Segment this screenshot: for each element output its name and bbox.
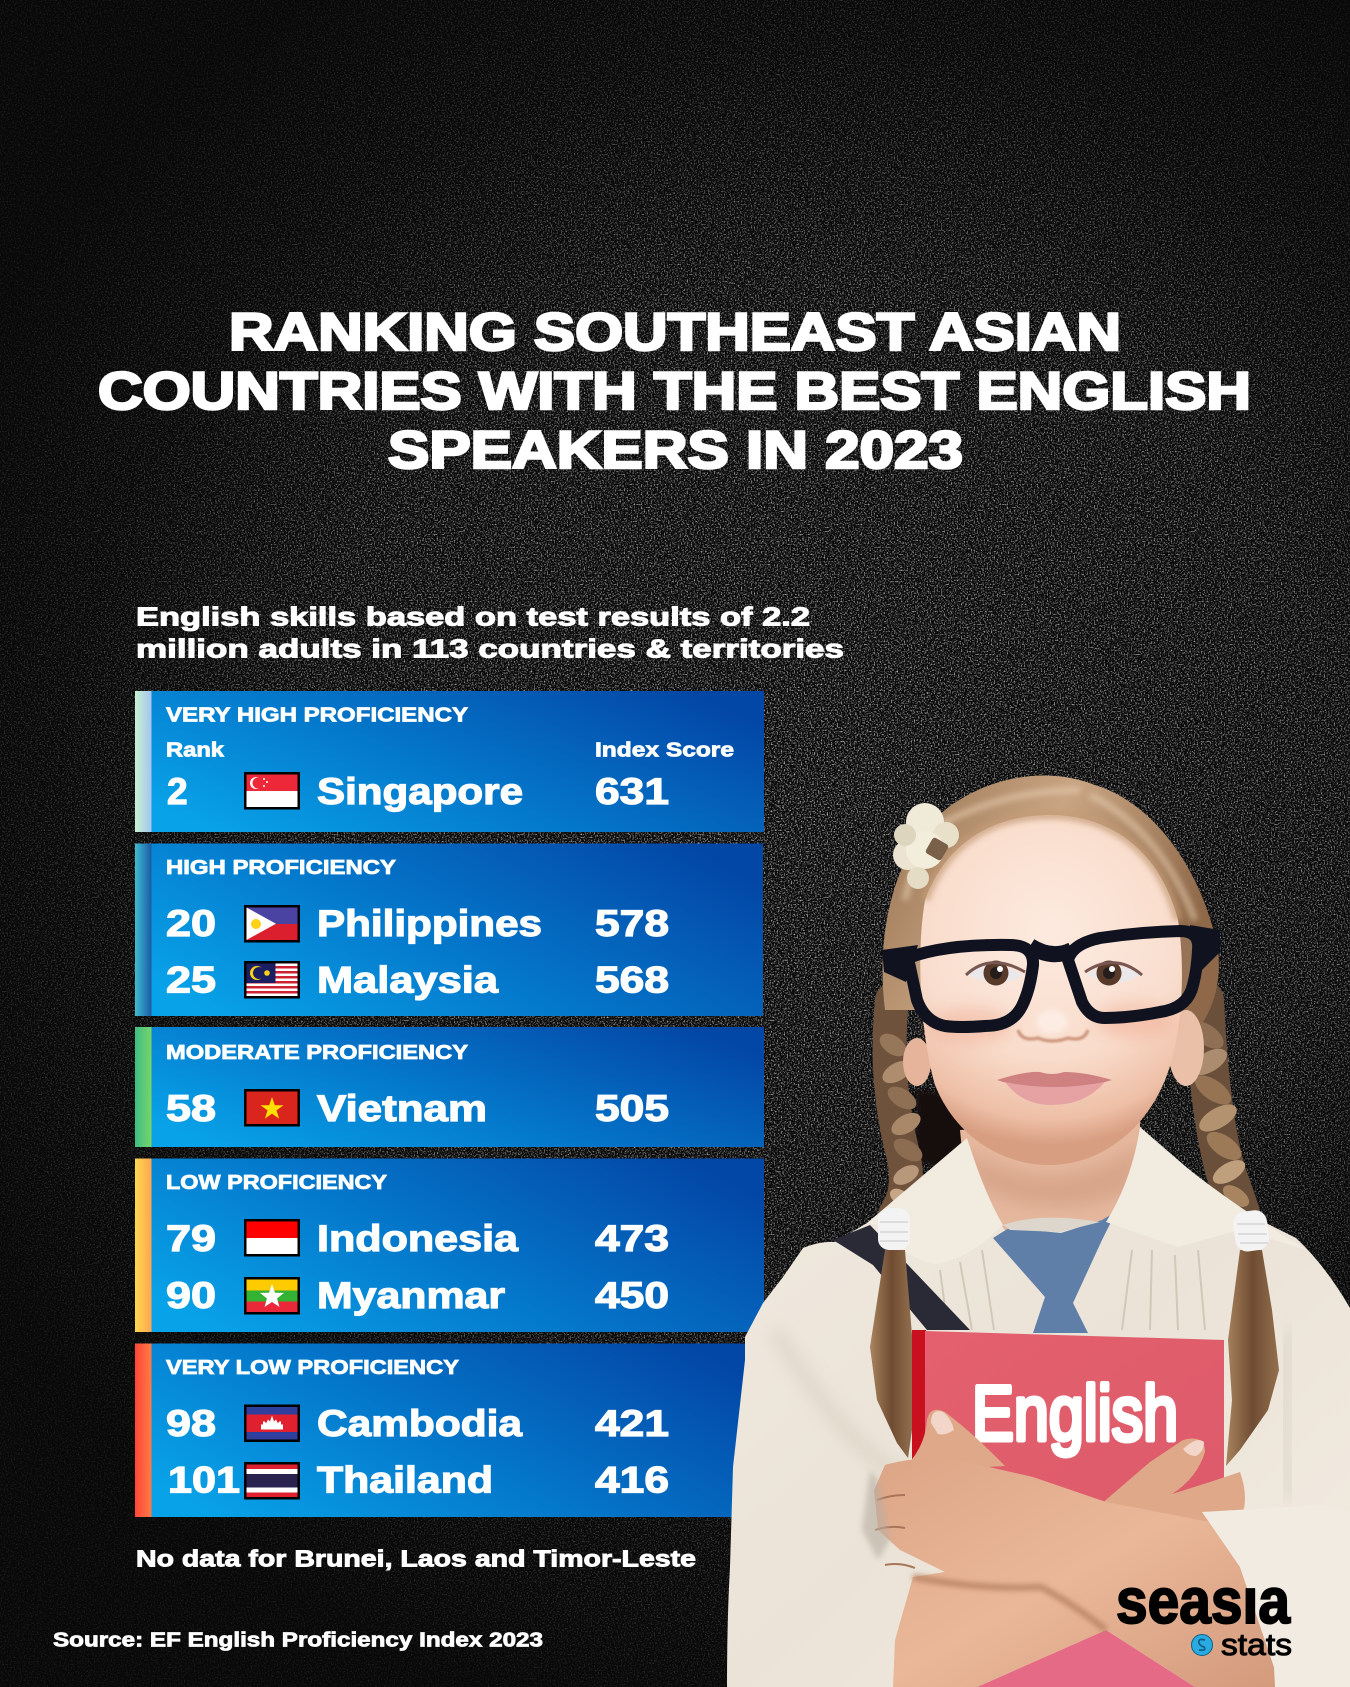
row: Malaysia (166, 960, 669, 1000)
flag: Philippines (244, 905, 300, 942)
row: Thailand: 416 (595, 1460, 669, 1500)
title: SPEAKERS IN 2023 (388, 421, 963, 480)
row: Singapore (167, 771, 669, 812)
row: Cambodia: 98 (166, 1403, 216, 1444)
row: Cambodia (166, 1403, 669, 1444)
lips (997, 1072, 1112, 1105)
row: Myanmar (166, 1275, 669, 1316)
row: Singapore: 631 (595, 771, 669, 812)
heading: moderate proficiency: MODERATE PROFICIENCY (166, 1042, 469, 1064)
row: Malaysia: 25 (166, 960, 216, 1000)
heading: very low proficiency: VERY LOW PROFICIENCY (166, 1357, 460, 1379)
row: Vietnam: 505 (595, 1088, 669, 1129)
collar (867, 1127, 1307, 1264)
neck (960, 1120, 1140, 1230)
soft hairline (925, 815, 1178, 920)
row: Malaysia: Malaysia (317, 960, 498, 1000)
title: COUNTRIES WITH THE BEST ENGLISH (98, 362, 1251, 421)
logo: seasia stats: seasia (1116, 1565, 1290, 1637)
shirt (727, 1127, 1350, 1687)
row: Malaysia: 568 (595, 960, 669, 1000)
backpack strap (833, 1225, 970, 1330)
row: Cambodia: Cambodia (317, 1403, 522, 1444)
hair flower clip (893, 803, 959, 889)
heading: very high proficiency: VERY HIGH PROFICIENCY (166, 704, 469, 726)
panel: moderate proficiency (135, 1027, 764, 1147)
column label: rank: Rank (166, 740, 225, 762)
row: Thailand: Thailand (317, 1460, 493, 1500)
row: Thailand: 101 (168, 1460, 240, 1500)
title (98, 303, 1251, 480)
logo: seasia stats (1116, 1587, 1292, 1656)
row: Indonesia: 79 (166, 1218, 216, 1259)
nose (1018, 1010, 1088, 1041)
row: Myanmar: Myanmar (317, 1275, 505, 1316)
hair (882, 775, 1219, 1030)
source: Source: EF English Proficiency Index 2023 (53, 1630, 543, 1652)
right ponytail (1226, 1209, 1279, 1466)
note: missing data: No data for Brunei, Laos and Timor-Leste (136, 1546, 696, 1572)
row: Philippines: 20 (166, 903, 216, 944)
book (912, 1330, 1224, 1687)
flag: Myanmar (244, 1277, 300, 1314)
row: Philippines (166, 903, 669, 944)
cheek blush (928, 1002, 1175, 1043)
row: Thailand (168, 1460, 669, 1500)
illustration: girl with glasses holding English book (727, 775, 1350, 1687)
row: Indonesia: 473 (595, 1218, 669, 1259)
flag: Cambodia (244, 1404, 300, 1442)
back hair and braids (876, 1000, 1253, 1220)
row: Myanmar: 450 (595, 1275, 669, 1316)
row: Singapore: Singapore (317, 771, 523, 812)
row: Philippines: 578 (595, 903, 669, 944)
icon: stats badge (1192, 1634, 1212, 1656)
column label: index score: Index Score (595, 740, 734, 762)
title: RANKING SOUTHEAST ASIAN (229, 303, 1121, 362)
right eye (1085, 960, 1142, 986)
row: Vietnam: 58 (166, 1088, 216, 1129)
row: Myanmar: 90 (166, 1275, 216, 1316)
head (882, 775, 1220, 1165)
flag: Indonesia (244, 1219, 300, 1256)
row: Singapore: 2 (167, 771, 188, 812)
heading: low proficiency: LOW PROFICIENCY (166, 1172, 388, 1194)
tie (993, 1212, 1116, 1333)
row: Cambodia: 421 (595, 1403, 669, 1444)
row: Indonesia (166, 1218, 669, 1259)
row: Indonesia: Indonesia (317, 1218, 518, 1259)
flag: Singapore (244, 772, 300, 810)
panel: high proficiency (135, 844, 763, 1016)
left ponytail (870, 1208, 913, 1458)
face (920, 815, 1182, 1165)
row: Vietnam (166, 1088, 669, 1129)
flag: Malaysia (244, 961, 300, 998)
heading: high proficiency: HIGH PROFICIENCY (166, 857, 397, 879)
ears (903, 1038, 931, 1086)
panel: very low proficiency (135, 1344, 764, 1517)
subtitle (136, 602, 844, 664)
panel: very high proficiency (135, 691, 764, 832)
arms and hands (862, 1410, 1350, 1687)
logo: seasia stats: stats (1221, 1627, 1292, 1662)
left eye (966, 960, 1025, 986)
book cover lettering: English (972, 1369, 1178, 1457)
glasses (882, 925, 1220, 1027)
subtitle: English skills based on test results of 2.2 (136, 602, 810, 632)
flag: Vietnam (244, 1089, 300, 1126)
row: Vietnam: Vietnam (317, 1088, 487, 1129)
panel: low proficiency (135, 1158, 764, 1332)
row: Philippines: Philippines (317, 903, 542, 944)
subtitle: million adults in 113 countries & territories (136, 634, 844, 664)
flag: Thailand (244, 1462, 300, 1500)
